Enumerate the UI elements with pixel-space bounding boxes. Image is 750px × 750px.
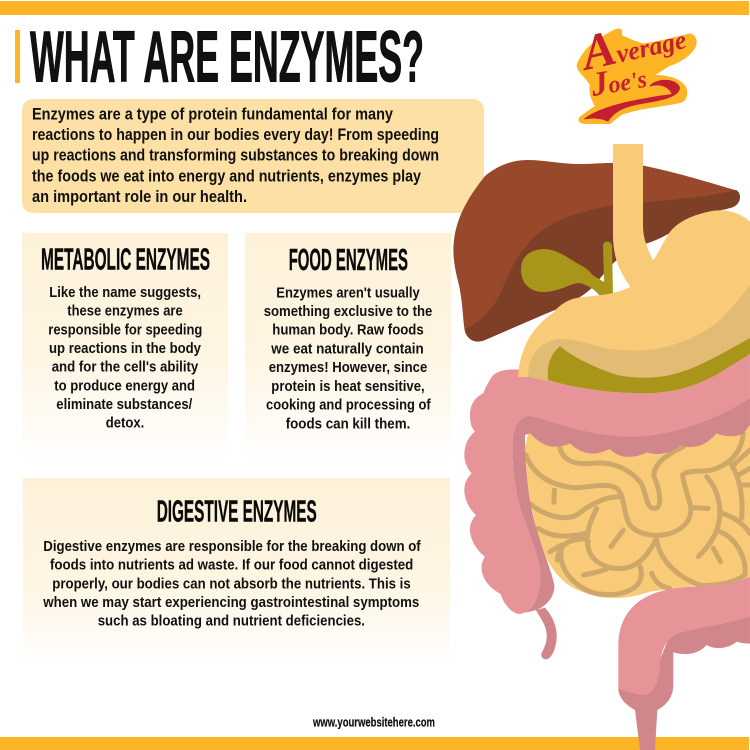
text: food description: foods can kill them.: [286, 416, 410, 432]
text: metabolic description: and for the cell's ability: [52, 359, 199, 376]
logo: Average Joe's: Average: [573, 4, 690, 81]
panel: digestive enzymes: DIGESTIVE ENZYMES: [157, 494, 317, 529]
website address: www.yourwebsitehere.com: [312, 715, 435, 730]
text: digestive description: such as bloating and nutrient deficiencies.: [98, 613, 365, 630]
title accent bar: [15, 30, 20, 83]
logo: Average Joe's: [573, 4, 697, 124]
logo: Average Joe's: Joe's: [587, 58, 649, 104]
text: food description: protein is heat sensitive,: [271, 378, 425, 395]
panel: introduction: Enzymes are a type of protein fundamental for many: [32, 106, 394, 124]
illustration: rectum: [618, 577, 750, 750]
text: digestive description: [42, 538, 422, 630]
illustration: rectum end over bar: [638, 737, 656, 750]
text: food description: [264, 284, 432, 432]
text: metabolic description: [48, 284, 202, 432]
text: metabolic description: up reactions in the body: [49, 340, 202, 357]
panel: food enzymes: FOOD ENZYMES: [289, 242, 408, 277]
panel: metabolic enzymes: METABOLIC ENZYMES: [41, 242, 210, 277]
text: metabolic description: Like the name suggests,: [49, 284, 201, 301]
panel: introduction: up reactions and transforming substances to breaking down: [32, 147, 439, 165]
illustration: esophagus: [613, 144, 654, 300]
text: metabolic description: responsible for speeding: [48, 321, 202, 338]
text: metabolic description: eliminate substances/: [56, 396, 193, 413]
text: digestive description: when we may start experiencing gastrointestinal symptoms: [42, 594, 419, 611]
illustration: colon: [464, 348, 750, 659]
panel: introduction: the foods we eat into energy and nutrients, enzymes play: [32, 167, 422, 185]
panel: introduction: reactions to happen in our bodies every day! From speeding: [32, 126, 439, 144]
illustration: gallbladder: [521, 242, 613, 296]
text: digestive description: properly, our bodies can not absorb the nutrients. This is: [52, 575, 411, 592]
text: metabolic description: these enzymes are: [67, 303, 183, 320]
text: food description: human body. Raw foods: [272, 322, 424, 339]
text: food description: we eat naturally contain: [270, 340, 424, 357]
panel: digestive enzymes: [23, 478, 450, 666]
text: food description: something exclusive to the: [264, 303, 432, 320]
illustration: digestive system: [453, 144, 750, 750]
text: metabolic description: to produce energy and: [54, 377, 195, 394]
illustration: liver: [453, 160, 740, 342]
panel: metabolic enzymes: [22, 233, 228, 461]
text: digestive description: Digestive enzymes are responsible for the breaking down of: [43, 538, 422, 555]
text: food description: enzymes! However, since: [269, 359, 427, 376]
illustration: stomach: [518, 210, 750, 393]
bottom banner bar: [0, 737, 749, 750]
text: food description: Enzymes aren't usually: [276, 284, 420, 301]
text: food description: cooking and processing of: [266, 396, 432, 414]
illustration: small intestine: [525, 425, 750, 598]
top banner bar: [0, 1, 749, 15]
panel: food enzymes: [245, 233, 451, 461]
text: digestive description: foods into nutrients ad waste. If our food cannot digested: [50, 557, 413, 574]
panel: introduction: an important role in our health.: [32, 188, 247, 206]
panel: introduction: [22, 99, 484, 213]
text: metabolic description: detox.: [106, 415, 144, 432]
